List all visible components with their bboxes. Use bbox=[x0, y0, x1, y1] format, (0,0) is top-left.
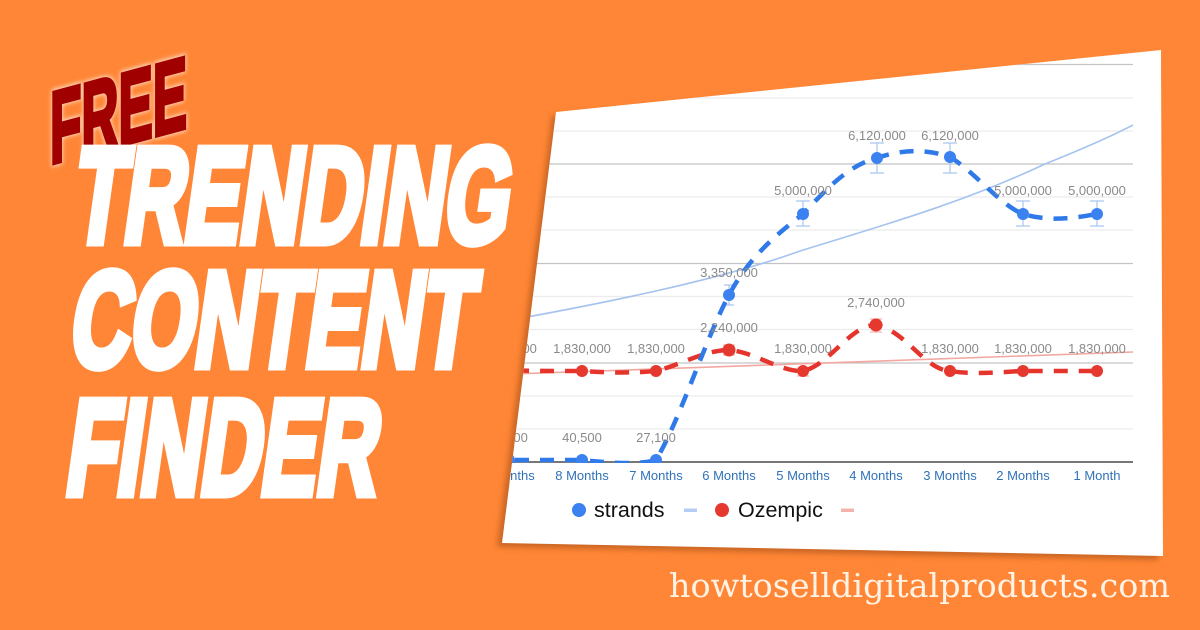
value labels: 6,120,000 bbox=[921, 128, 979, 143]
x axis labels: 7 Months bbox=[629, 468, 683, 483]
paper shadow bbox=[497, 60, 1158, 560]
grid lines bbox=[480, 64, 1133, 462]
series: Ozempic dashed line bbox=[490, 325, 1097, 373]
data points: Ozempic bbox=[576, 318, 1103, 377]
FREE glow: FREE bbox=[50, 35, 187, 186]
x axis labels: 9 Months bbox=[481, 468, 535, 483]
x axis labels: 4 Months bbox=[849, 468, 903, 483]
heading: FREE: FREE bbox=[50, 35, 187, 186]
value labels: 1,830,000 bbox=[627, 341, 685, 356]
heading: CONTENT: CONTENT bbox=[63, 244, 486, 395]
x axis labels: 1 Month bbox=[1074, 468, 1120, 483]
legend: strands bbox=[594, 498, 665, 522]
value labels: 40,500 bbox=[562, 430, 602, 445]
trend line: Ozempic bbox=[500, 352, 1133, 374]
x axis labels: 2 Months bbox=[996, 468, 1050, 483]
website url: howtoselldigitalproducts.com bbox=[669, 566, 1170, 605]
value labels: 2,240,000 bbox=[700, 320, 758, 335]
white mask below axis bbox=[510, 463, 662, 483]
value labels: 1,830,000 bbox=[921, 341, 979, 356]
heading: TRENDING: TRENDING bbox=[66, 120, 523, 271]
x axis labels: 6 Months bbox=[702, 468, 756, 483]
value labels: 6,120,000 bbox=[848, 128, 906, 143]
value labels: 5,000,000 bbox=[994, 183, 1052, 198]
value labels: 27,100 bbox=[636, 430, 676, 445]
value labels: 1,830,000 bbox=[1068, 341, 1126, 356]
legend: Ozempic bbox=[738, 498, 823, 522]
error bars: strands bbox=[724, 143, 1104, 305]
series: strands dashed line bbox=[490, 151, 1097, 463]
heading: FINDER: FINDER bbox=[59, 372, 391, 523]
legend bbox=[572, 502, 854, 522]
value labels: 1,830,000 bbox=[553, 341, 611, 356]
x axis labels: 5 Months bbox=[776, 468, 830, 483]
x axis labels: 8 Months bbox=[555, 468, 609, 483]
value labels: 1,830,000 bbox=[479, 341, 537, 356]
panel: trend chart on tilted paper bbox=[479, 50, 1163, 556]
value labels: 5,000,000 bbox=[1068, 183, 1126, 198]
value labels: 2,740,000 bbox=[847, 295, 905, 310]
value labels bbox=[479, 128, 1126, 445]
data points: strands bbox=[503, 151, 1103, 466]
x axis labels: 3 Months bbox=[923, 468, 977, 483]
error bars: Ozempic bbox=[723, 319, 882, 376]
value labels: 3,350,000 bbox=[700, 265, 758, 280]
value labels: 1,830,000 bbox=[994, 341, 1052, 356]
value labels: 5,000,000 bbox=[774, 183, 832, 198]
value labels: 40,500 bbox=[488, 430, 528, 445]
trend line: strands bbox=[500, 125, 1133, 322]
value labels: 1,830,000 bbox=[774, 341, 832, 356]
x axis labels bbox=[511, 470, 1120, 480]
